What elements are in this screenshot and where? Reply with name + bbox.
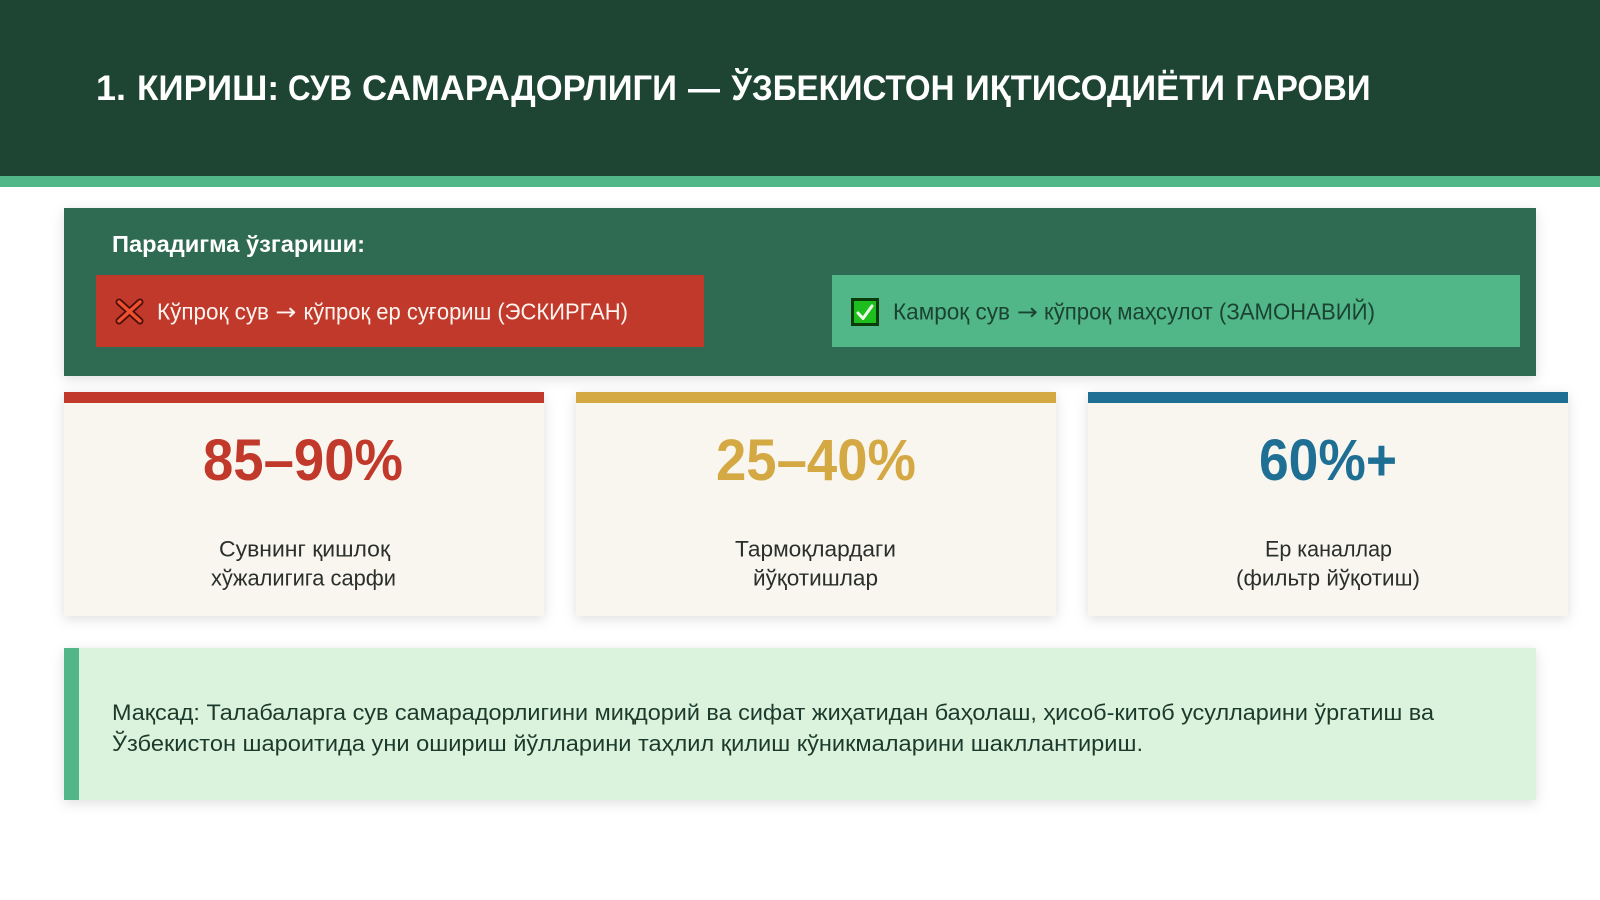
title: КИРИШ: [137,69,279,108]
stat card: network losses [576,392,1056,616]
stat label: хўжалигига сарфи [211,566,396,590]
stat value: 85–90% [203,428,403,493]
old paradigm box [96,275,704,347]
old paradigm text: кўпроқ ер суғориш (ЭСКИРГАН) [304,298,628,324]
stat card: earthen canals [1088,392,1568,616]
new paradigm text: Камроқ сув [893,298,1010,324]
title: ИҚТИСОДИЁТИ [965,69,1225,108]
panel: paradigm shift [64,208,1536,376]
stat label: Тармоқлардаги [735,536,896,562]
title: ГАРОВИ [1236,69,1370,108]
goal callout [64,648,1536,800]
panel heading: Парадигма ўзгариши: [112,231,365,257]
title: ЎЗБЕКИСТОН [731,67,954,108]
old paradigm text: Кўпроқ сув [157,298,269,324]
title: 1. [96,69,126,108]
stat label: йўқотишлар [753,566,878,590]
header banner [0,0,1600,187]
new paradigm text: кўпроқ маҳсулот (ЗАМОНАВИЙ) [1044,298,1375,324]
title: СУВ [288,69,352,108]
icon: check mark [852,300,878,324]
stat label: Сувнинг қишлоқ [219,536,390,562]
stat label: Ер каналлар [1265,536,1392,562]
new paradigm text: → [1017,300,1038,326]
old paradigm text: → [276,300,296,326]
icon: cross [119,302,140,321]
stat label: (фильтр йўқотиш) [1236,566,1420,590]
stat value: 60%+ [1259,428,1397,493]
new paradigm box [832,275,1520,347]
stat value: 25–40% [716,428,916,493]
stat card: agriculture water use [64,392,544,616]
goal text: Мақсад: Талабаларга сув самарадорлигини миқдорий ва сифат жиҳатидан баҳолаш, ҳисоб-китоб усулларини ўргатиш ва [112,700,1434,725]
goal text: Ўзбекистон шароитида уни ошириш йўлларини таҳлил қилиш кўникмаларини шакллантириш. [112,730,1143,756]
title: САМАРАДОРЛИГИ [362,69,677,108]
title: — [688,69,720,108]
